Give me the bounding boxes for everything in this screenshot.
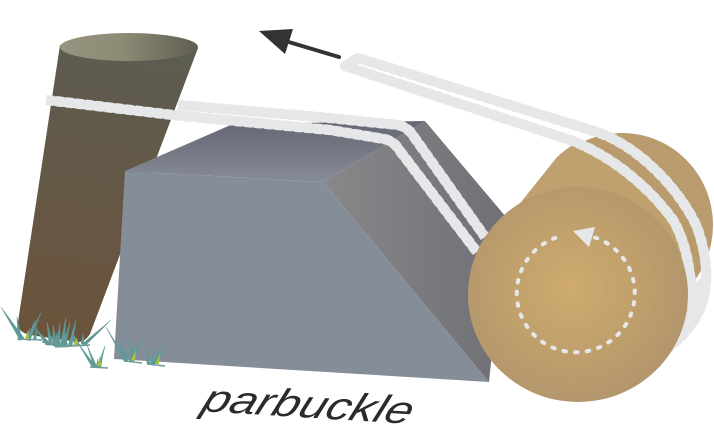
boulder front face — [114, 171, 489, 382]
grass lime highlights — [25, 330, 160, 366]
boulder right face — [323, 121, 506, 382]
caption: parbuckle — [195, 378, 421, 432]
boulder top face — [125, 121, 425, 182]
log body — [478, 143, 692, 395]
rope around post and over boulder: lower strand — [46, 100, 477, 252]
boulder — [114, 121, 506, 382]
rotation indicator: arrowhead — [573, 227, 595, 247]
grass blades — [1, 307, 169, 367]
rope loop: both strands — [345, 58, 706, 348]
rope bumps — [345, 58, 706, 348]
rope wrap behind log — [660, 272, 709, 352]
log front end — [468, 187, 688, 402]
post top — [60, 33, 198, 61]
grass tufts — [1, 307, 169, 368]
log back end — [531, 133, 713, 317]
rope coils on log — [345, 58, 706, 348]
pull direction arrow — [259, 29, 339, 57]
post — [18, 33, 198, 342]
rotation indicator: dotted circle — [517, 237, 635, 352]
grass bases — [20, 339, 165, 368]
rope over boulder: upper strand — [178, 105, 485, 237]
